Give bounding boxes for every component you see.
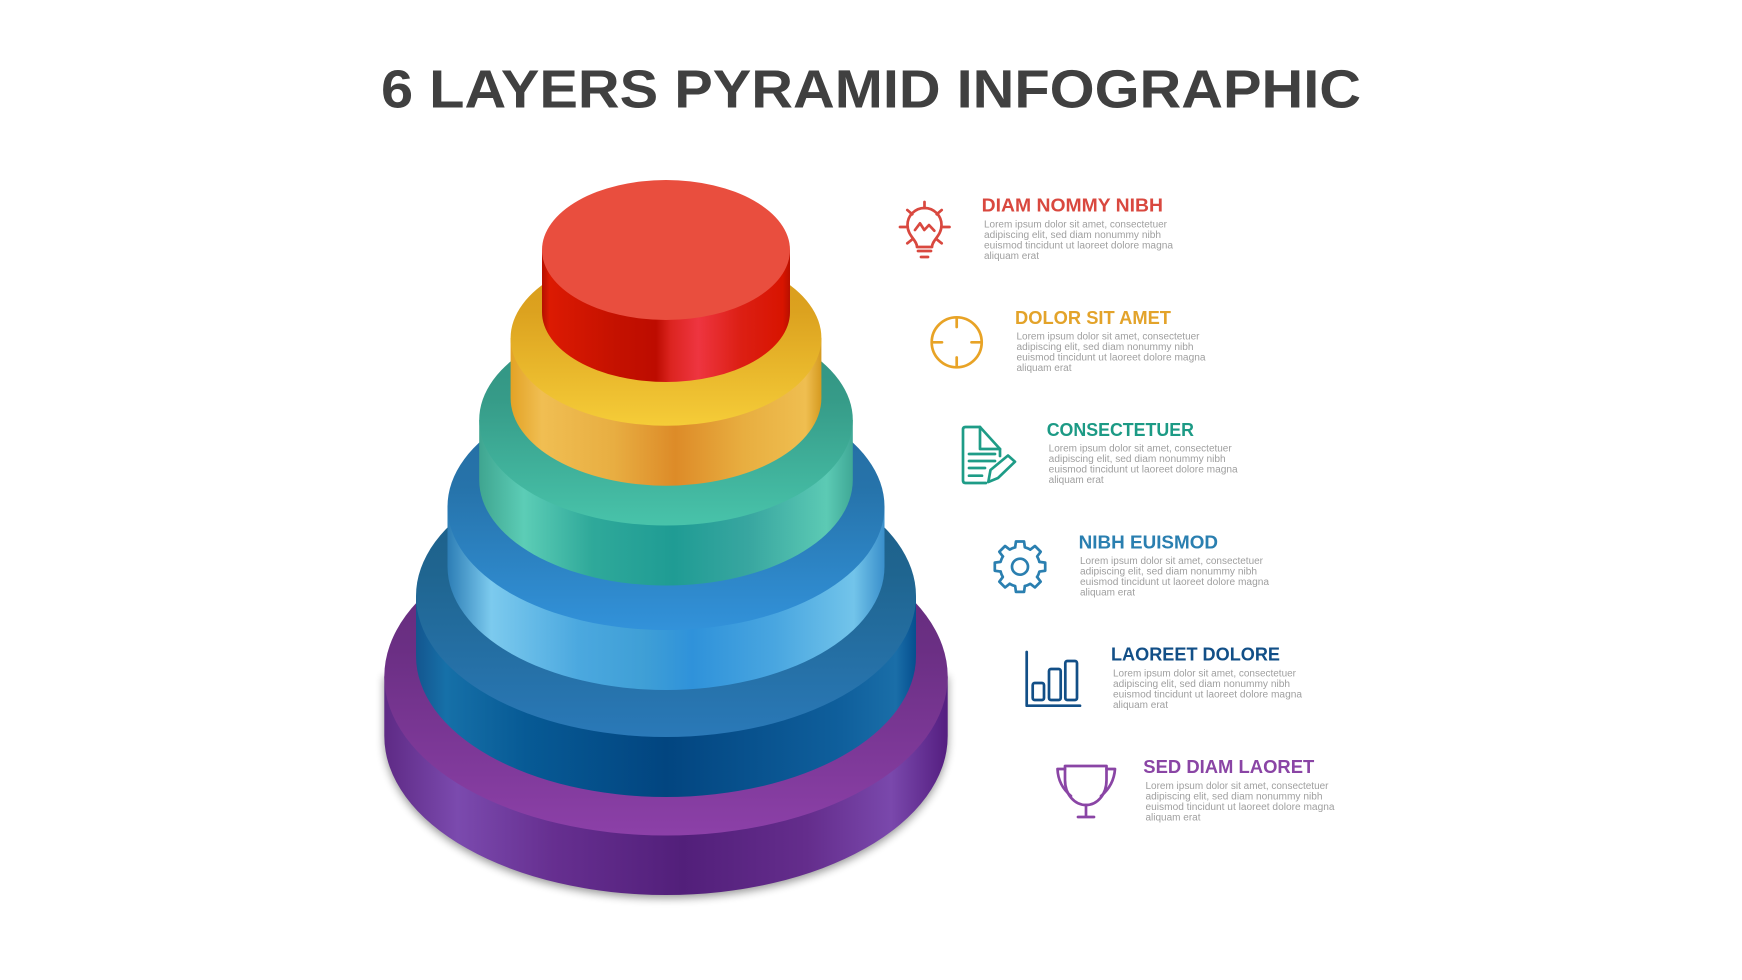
- heading: DOLOR SIT AMET: [1015, 307, 1172, 328]
- description: [1016, 332, 1206, 374]
- description: aliquam erat: [1049, 475, 1104, 486]
- layer 1: red: [542, 180, 790, 382]
- description: [1049, 444, 1238, 486]
- icon: gear: [995, 542, 1045, 592]
- heading: NIBH EUISMOD: [1079, 531, 1218, 552]
- description: [1146, 781, 1335, 824]
- item 4: [995, 531, 1270, 598]
- item 3: [963, 419, 1238, 486]
- description: Lorem ipsum dolor sit amet, consectetuer: [984, 219, 1168, 230]
- pyramid chart: [384, 180, 948, 898]
- item 1: [900, 195, 1174, 262]
- description: aliquam erat: [1146, 812, 1201, 824]
- description: adipiscing elit, sed diam nonummy nibh: [1016, 342, 1194, 353]
- description: adipiscing elit, sed diam nonummy nibh: [1146, 792, 1322, 802]
- description: Lorem ipsum dolor sit amet, consectetuer: [1146, 781, 1329, 792]
- description: euismod tincidunt ut laoreet dolore magna: [1049, 465, 1238, 476]
- title: 6 LAYERS PYRAMID INFOGRAPHIC: [381, 60, 1361, 120]
- description: adipiscing elit, sed diam nonummy nibh: [1049, 454, 1226, 465]
- heading: CONSECTETUER: [1047, 419, 1194, 440]
- description: euismod tincidunt ut laoreet dolore magna: [1080, 577, 1270, 588]
- layer 5: dark blue: [416, 455, 916, 797]
- icon: bar chart: [1027, 652, 1080, 706]
- description: [1113, 668, 1303, 711]
- description: Lorem ipsum dolor sit amet, consectetuer: [1016, 332, 1200, 343]
- description: aliquam erat: [1080, 588, 1135, 598]
- description: Lorem ipsum dolor sit amet, consectetuer: [1049, 444, 1232, 455]
- layer 2: yellow: [511, 250, 821, 486]
- icon: trophy: [1058, 766, 1115, 817]
- layer 4: blue: [448, 383, 884, 690]
- layer 3: green: [479, 314, 853, 586]
- description: aliquam erat: [984, 251, 1039, 262]
- heading: DIAM NOMMY NIBH: [982, 195, 1163, 216]
- description: Lorem ipsum dolor sit amet, consectetuer: [1113, 668, 1297, 679]
- description: adipiscing elit, sed diam nonummy nibh: [1080, 566, 1257, 578]
- ground shadow: [384, 676, 948, 898]
- description: aliquam erat: [1016, 363, 1072, 374]
- description: euismod tincidunt ut laoreet dolore magna: [1016, 353, 1206, 364]
- description: adipiscing elit, sed diam nonummy nibh: [984, 230, 1161, 241]
- item 6: [1058, 756, 1335, 824]
- description: euismod tincidunt ut laoreet dolore magna: [1113, 689, 1303, 700]
- description: adipiscing elit, sed diam nonummy nibh: [1113, 679, 1290, 690]
- description: Lorem ipsum dolor sit amet, consectetuer: [1080, 556, 1264, 567]
- description: [1080, 556, 1270, 598]
- layer 6: purple: [384, 518, 948, 895]
- heading: SED DIAM LAORET: [1143, 756, 1315, 777]
- description: aliquam erat: [1113, 700, 1168, 711]
- description: [984, 219, 1174, 262]
- heading: LAOREET DOLORE: [1111, 644, 1280, 665]
- item 2: [932, 307, 1206, 374]
- icon: document with pencil: [963, 427, 1015, 483]
- description: euismod tincidunt ut laoreet dolore magna: [1146, 802, 1335, 813]
- icon: light bulb: [900, 202, 950, 257]
- description: euismod tincidunt ut laoreet dolore magna: [984, 240, 1174, 251]
- item 5: [1027, 644, 1303, 711]
- icon: target: [932, 317, 982, 367]
